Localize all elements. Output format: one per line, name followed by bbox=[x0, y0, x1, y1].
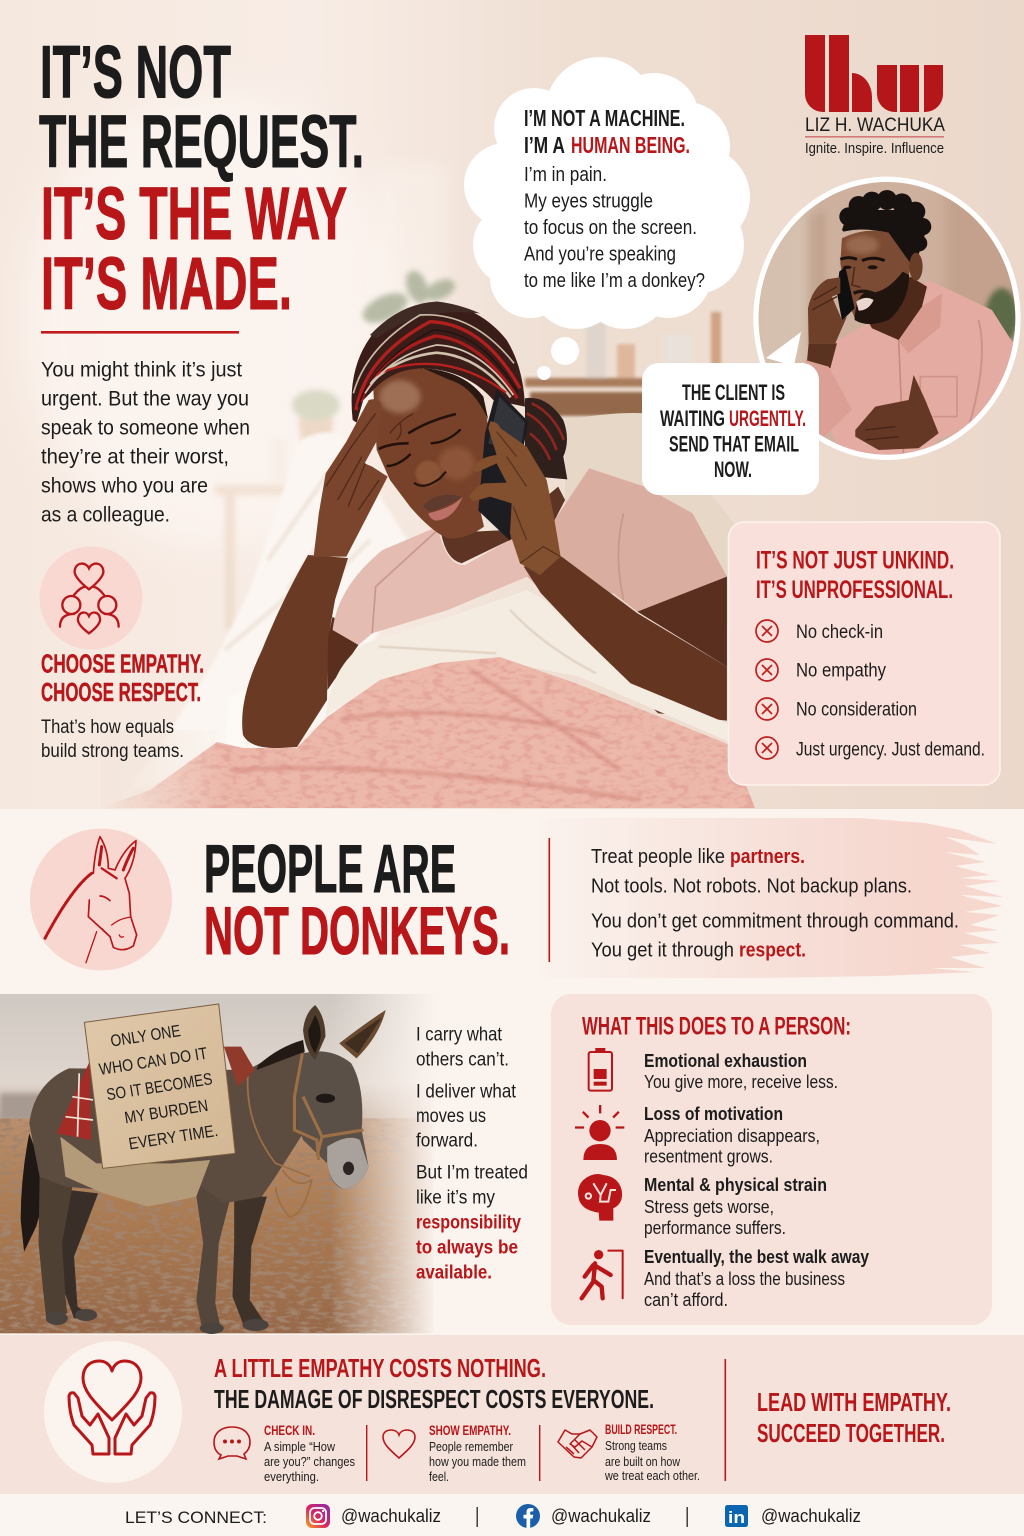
panel: what this does to a person: WHAT THIS DOES TO A PERSON: bbox=[582, 1012, 851, 1040]
donkey quote text: forward. bbox=[416, 1130, 478, 1152]
right hand bbox=[469, 422, 561, 575]
banner text: Not tools. Not robots. Not backup plans. bbox=[591, 876, 912, 898]
donkey head bbox=[296, 1051, 369, 1189]
banner text: Treat people like bbox=[591, 846, 725, 868]
panel: not just unkind: No check-in bbox=[796, 622, 883, 643]
intro paragraph bbox=[41, 358, 250, 526]
icon: low battery bbox=[589, 1048, 612, 1091]
footer: @wachukaliz bbox=[341, 1506, 441, 1526]
brows and closed eyes bbox=[379, 414, 456, 449]
tip: show empathy bbox=[429, 1422, 526, 1484]
icon: brain bbox=[578, 1174, 622, 1221]
thought bubble: My eyes struggle bbox=[524, 190, 653, 212]
icon: people and hearts bbox=[40, 546, 142, 650]
title: IT’S NOT bbox=[40, 30, 231, 114]
banner text bbox=[591, 846, 959, 962]
thought bubble: I’M A bbox=[524, 132, 565, 158]
footer: LET’S CONNECT: bbox=[125, 1508, 267, 1527]
headline bbox=[214, 1353, 654, 1414]
nose bbox=[414, 472, 446, 486]
panel: what this does to a person: Emotional exhaustion bbox=[644, 1051, 807, 1071]
red rule bbox=[41, 331, 239, 334]
back legs bbox=[60, 1190, 98, 1318]
upper arm under sleeve bbox=[327, 617, 362, 690]
blanket fade at left bbox=[100, 730, 225, 809]
panel: what this does to a person: Appreciation disappears, bbox=[644, 1126, 820, 1146]
head, face and hands bbox=[352, 302, 567, 575]
icon: person with fading sun bbox=[575, 1105, 624, 1160]
donkey quote text: to always be bbox=[416, 1238, 518, 1258]
thought bubble bbox=[464, 57, 750, 380]
panel: what this does to a person: can’t afford. bbox=[644, 1290, 728, 1310]
panel: not just unkind: Just urgency. Just demand. bbox=[796, 740, 985, 760]
donkey ears bbox=[303, 1005, 325, 1060]
donkey photo bbox=[0, 990, 448, 1335]
thought bubble: I’m in pain. bbox=[524, 164, 607, 186]
gesturing hand bbox=[855, 375, 939, 450]
donkey quote text: others can’t. bbox=[416, 1050, 509, 1070]
raised hand bbox=[808, 277, 847, 343]
portrait: man on the phone bbox=[745, 167, 1024, 467]
intro paragraph: urgent. But the way you bbox=[41, 386, 249, 410]
face bbox=[840, 231, 910, 324]
headline: NOT DONKEYS. bbox=[204, 893, 510, 969]
choose empathy heading: CHOOSE EMPATHY. bbox=[41, 648, 204, 678]
brush stroke bbox=[540, 818, 1003, 978]
back pillow right bbox=[565, 413, 740, 633]
thought bubble: I’M NOT A MACHINE. bbox=[524, 105, 685, 131]
front legs bbox=[232, 1197, 267, 1323]
icon: person walking out bbox=[582, 1250, 623, 1298]
panel: what this does to a person: Loss of motivation bbox=[644, 1104, 783, 1124]
icon: heart bbox=[383, 1430, 415, 1458]
icon: hands holding heart bbox=[44, 1341, 182, 1483]
speech bubble: WAITING bbox=[660, 406, 725, 431]
icon: linkedin bbox=[725, 1505, 748, 1527]
tip: show empathy: People remember bbox=[429, 1439, 514, 1454]
icon: linkedin: in bbox=[728, 1508, 745, 1527]
panel: what this does to a person: resentment grows. bbox=[644, 1146, 773, 1166]
head wrap knot bbox=[525, 398, 567, 479]
tip: build respect: Strong teams bbox=[605, 1438, 667, 1453]
choose empathy heading bbox=[41, 648, 204, 707]
t-shirt bbox=[333, 468, 727, 645]
headline: PEOPLE ARE bbox=[204, 831, 456, 907]
intro paragraph: they’re at their worst, bbox=[41, 444, 229, 468]
panel: what this does to a person bbox=[551, 994, 992, 1325]
panel: what this does to a person: You give more, receive less. bbox=[644, 1072, 838, 1092]
banner: people are not donkeys bbox=[0, 809, 1024, 982]
tip: show empathy: SHOW EMPATHY. bbox=[429, 1422, 511, 1438]
tip: build respect: are built on how bbox=[605, 1454, 680, 1469]
right upper arm and forearm bbox=[637, 577, 727, 667]
intro paragraph: You might think it’s just bbox=[41, 358, 242, 382]
left forearm bbox=[242, 555, 348, 748]
hair bbox=[839, 190, 931, 263]
logo bbox=[805, 35, 945, 157]
donkey quote text: available. bbox=[416, 1262, 492, 1284]
neck bbox=[865, 277, 927, 340]
intro paragraph: as a colleague. bbox=[41, 502, 170, 526]
phone bbox=[837, 267, 855, 321]
tip: show empathy: how you made them bbox=[429, 1454, 526, 1469]
tip: show empathy: feel. bbox=[429, 1469, 449, 1484]
tip: check in bbox=[264, 1422, 355, 1484]
tip: check in: everything. bbox=[264, 1469, 319, 1484]
icon: handshake bbox=[558, 1430, 597, 1458]
donkey quote text: I deliver what bbox=[416, 1082, 517, 1102]
panel: what this does to a person: Eventually, the best walk away bbox=[644, 1247, 869, 1267]
speech bubble: NOW. bbox=[714, 457, 752, 482]
pink patterned blanket bbox=[100, 657, 755, 808]
footer: @wachukaliz bbox=[551, 1506, 651, 1526]
thought bubble: And you’re speaking bbox=[524, 244, 676, 266]
footer: @wachukaliz bbox=[761, 1506, 861, 1526]
logo: LIZ H. WACHUKA bbox=[805, 115, 945, 136]
headline bbox=[204, 831, 510, 969]
phone bbox=[478, 389, 528, 541]
left hand at temple bbox=[314, 399, 388, 557]
closing call to action bbox=[757, 1387, 951, 1448]
donkey quote text: But I’m treated bbox=[416, 1162, 528, 1184]
intro paragraph: speak to someone when bbox=[41, 416, 250, 440]
title bbox=[39, 30, 364, 325]
choose empathy text: That’s how equals bbox=[41, 717, 174, 738]
banner text: partners. bbox=[730, 846, 805, 868]
bottom banner bbox=[0, 1335, 1024, 1494]
sleeve bbox=[805, 360, 852, 440]
panel: not just unkind bbox=[728, 522, 1000, 785]
tip: check in: are you?” changes bbox=[264, 1454, 355, 1469]
face bbox=[373, 368, 488, 539]
headline: THE DAMAGE OF DISRESPECT COSTS EVERYONE. bbox=[214, 1384, 654, 1414]
panel: not just unkind: No consideration bbox=[796, 700, 917, 720]
intro paragraph: shows who you are bbox=[41, 474, 208, 498]
speech bubble: URGENTLY. bbox=[729, 406, 806, 431]
tip: build respect: we treat each other. bbox=[604, 1468, 700, 1483]
body and neck bbox=[29, 1047, 310, 1203]
choose empathy text: build strong teams. bbox=[41, 741, 184, 762]
white duvet bbox=[326, 590, 740, 747]
brows and eyes bbox=[840, 258, 885, 261]
white bedding left bbox=[130, 432, 420, 790]
panel: what this does to a person: Stress gets worse, bbox=[644, 1197, 774, 1217]
headline: A LITTLE EMPATHY COSTS NOTHING. bbox=[214, 1353, 546, 1383]
halter and rope bbox=[248, 1053, 363, 1217]
panel: what this does to a person: performance suffers. bbox=[644, 1218, 786, 1238]
title: THE REQUEST. bbox=[39, 100, 364, 183]
right photo fade bbox=[331, 990, 448, 1335]
donkey quote text: responsibility bbox=[416, 1212, 521, 1234]
banner text: You get it through bbox=[591, 940, 734, 962]
beard bbox=[855, 272, 909, 324]
title: IT’S MADE. bbox=[41, 242, 292, 325]
tip: check in: CHECK IN. bbox=[264, 1422, 315, 1438]
tip: build respect bbox=[604, 1421, 700, 1483]
icon: instagram bbox=[306, 1504, 330, 1528]
sign on the donkey: MY BURDEN bbox=[123, 1096, 209, 1127]
donkey tail bbox=[21, 1133, 43, 1252]
choose empathy text bbox=[41, 717, 184, 762]
thought bubble: HUMAN BEING. bbox=[571, 132, 690, 158]
banner text: You don’t get commitment through command. bbox=[591, 910, 959, 932]
thought bubble: to me like I’m a donkey? bbox=[524, 270, 705, 292]
panel: not just unkind: No empathy bbox=[796, 660, 886, 682]
sign on the donkey: SO IT BECOMES bbox=[105, 1069, 214, 1104]
sign on the donkey: WHO CAN DO IT bbox=[98, 1044, 209, 1079]
icon: facebook bbox=[516, 1504, 540, 1528]
title: IT’S THE WAY bbox=[41, 172, 347, 255]
sign on the donkey: ONLY ONE bbox=[109, 1021, 182, 1051]
background plant bbox=[358, 268, 458, 329]
choose empathy heading: CHOOSE RESPECT. bbox=[41, 677, 201, 707]
speech bubble: THE CLIENT IS bbox=[682, 380, 785, 405]
forearm bbox=[807, 343, 837, 368]
shirt bbox=[805, 280, 1015, 467]
woman on the phone in bed bbox=[100, 302, 755, 809]
donkey quote text: like it’s my bbox=[416, 1188, 495, 1208]
tip: build respect: BUILD RESPECT. bbox=[605, 1421, 677, 1437]
icon: donkey head bbox=[30, 828, 172, 970]
thought bubble: to focus on the screen. bbox=[524, 217, 697, 239]
icon: chat bubble bbox=[214, 1427, 250, 1459]
panel: what this does to a person: And that’s a loss the business bbox=[644, 1269, 845, 1289]
tip: check in: A simple “How bbox=[264, 1439, 336, 1454]
speech bubble: SEND THAT EMAIL bbox=[669, 432, 799, 456]
ear bbox=[909, 253, 923, 281]
donkey quote text: moves us bbox=[416, 1106, 486, 1127]
donkey quote text: I carry what bbox=[416, 1024, 503, 1046]
sign on the donkey bbox=[84, 1004, 235, 1168]
lips bbox=[423, 495, 462, 512]
saddle bag bbox=[60, 1137, 210, 1207]
background shelf with bottles bbox=[525, 312, 721, 416]
logo: Ignite. Inspire. Influence bbox=[805, 140, 944, 157]
banner text: respect. bbox=[739, 940, 806, 962]
background side table bbox=[215, 390, 340, 630]
neck bbox=[441, 487, 565, 563]
sign on the donkey: EVERY TIME. bbox=[127, 1121, 219, 1153]
donkey quote text bbox=[416, 1024, 528, 1284]
footer bbox=[0, 1494, 1024, 1536]
head wrap bbox=[352, 302, 525, 423]
speech bubble bbox=[642, 332, 819, 495]
panel: what this does to a person: Mental & physical strain bbox=[644, 1175, 827, 1195]
